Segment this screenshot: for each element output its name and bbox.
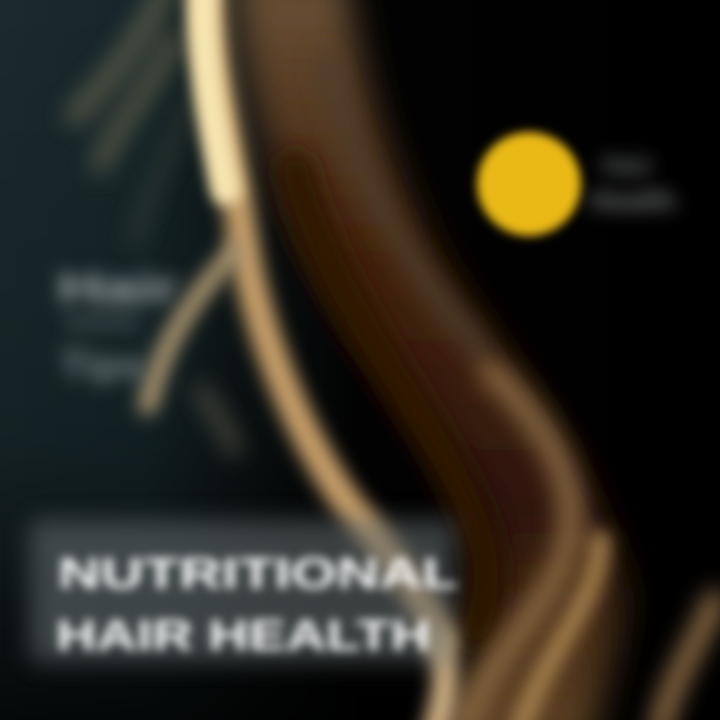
text block: left labels [58,264,178,387]
title: HAIR HEALTH [56,611,431,660]
title [56,549,458,660]
panel: title background [30,520,455,662]
hair: deep red-brown core [295,170,486,630]
hair: forked branch [148,250,236,405]
hair: bottom strand [435,640,445,720]
hair: dark brown body [235,0,625,720]
text block: top right label [590,150,676,216]
hair: wispy left strands [75,0,190,240]
text block: top right label: Hair [602,150,653,180]
text block: top right label: Health [590,185,676,216]
hair: outer gold strand [465,370,571,720]
hair: taupe upper highlight [325,60,480,350]
icon: yellow circle [477,132,581,236]
text block: left labels: Hair [58,264,178,311]
hair: bright main strand [208,0,440,640]
hair: far right strand [660,600,715,720]
hair: lower gold strand [520,540,600,720]
text block: left labels: Tips [60,345,145,387]
title: NUTRITIONAL [58,549,458,598]
